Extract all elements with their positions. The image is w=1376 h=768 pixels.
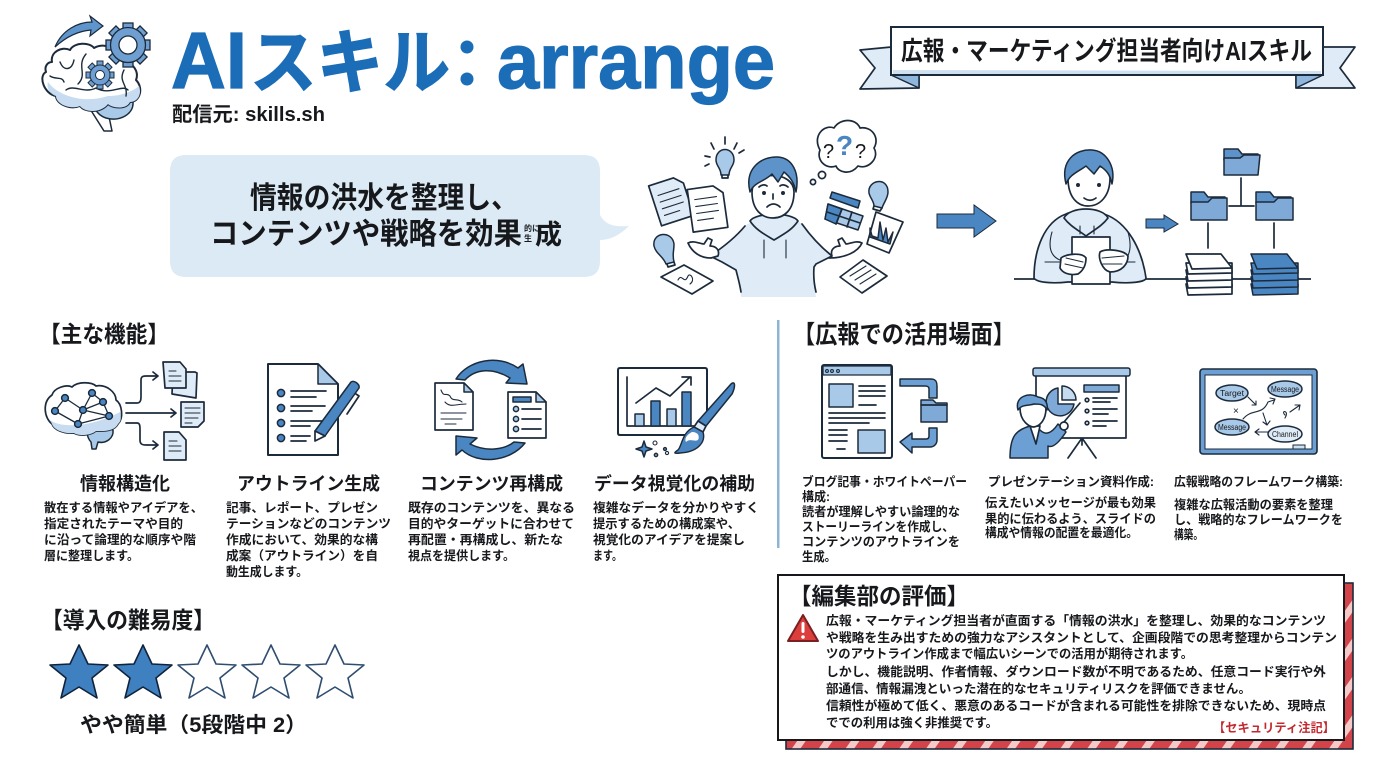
use case text: presentation: 伝えたいメッセージが最も効果 xyxy=(985,495,1156,510)
icon: strategy whiteboard xyxy=(1200,369,1317,454)
icon: outline document with pen xyxy=(268,364,359,455)
icon: blog window with folder xyxy=(822,365,947,458)
heading: PR use cases: 【広報での活用場面】 xyxy=(793,321,1015,349)
thought bubble with question marks xyxy=(810,120,876,185)
speech bubble: tagline: コンテンツや戦略を効果 xyxy=(210,218,522,251)
feature text: restructure xyxy=(408,500,575,563)
icon: warning triangle xyxy=(788,615,818,641)
use case text: blog: 生成。 xyxy=(802,549,836,564)
feature title: restructure: コンテンツ再構成 xyxy=(420,473,563,494)
icon: light bulb top xyxy=(705,137,744,178)
panel: editorial review xyxy=(778,575,1353,749)
star rating: 2 of 5 xyxy=(50,645,364,698)
feature text: restructure: 再配置・再構成し、新たな xyxy=(408,532,563,547)
heading: difficulty: 【導入の難易度】 xyxy=(41,607,215,633)
feature text: structuring: 指定されたテーマや目的 xyxy=(44,516,183,531)
feature title: outline: アウトライン生成 xyxy=(237,473,380,494)
use case text: framework: し、戦略的なフレームワークを xyxy=(1174,512,1343,527)
use case text: blog: ストーリーラインを作成し、 xyxy=(802,519,954,534)
feature text: data visualization: 提示するための構成案や、 xyxy=(593,516,740,531)
review text: や戦略を生み出すための強力なアシスタントとして、企画段階での思考整理からコンテン xyxy=(826,630,1337,645)
icon: light bulb right xyxy=(869,182,888,211)
feature text: outline: 記事、レポート、プレゼン xyxy=(226,500,378,515)
title: arrange xyxy=(497,17,775,105)
use case text: blog xyxy=(802,474,967,564)
thought bubble with question marks: ? xyxy=(836,130,853,161)
feature text: structuring: 層に整理します。 xyxy=(44,548,139,563)
arrow: before to after xyxy=(937,205,996,237)
review text: 部通信、情報漏洩といった潜在的なセキュリティリスクを評価できません。 xyxy=(826,681,1251,696)
icon: light bulb left low xyxy=(654,234,675,267)
feature text: restructure: 既存のコンテンツを、異なる xyxy=(408,500,575,515)
feature text: restructure: 視点を提供します。 xyxy=(408,548,515,563)
difficulty label: やや簡単（5段階中 2） xyxy=(80,714,307,737)
icon: strategy whiteboard: Message xyxy=(1218,423,1246,432)
use case text: blog: 構成: xyxy=(802,489,830,504)
table chart xyxy=(825,192,863,230)
feature text: data visualization xyxy=(593,500,759,563)
blue paper stack xyxy=(1251,254,1298,295)
speech bubble: tagline xyxy=(170,155,629,277)
feature title: data visualization: データ視覚化の補助 xyxy=(594,473,755,494)
use case text: framework: 複雑な広報活動の要素を整理 xyxy=(1174,497,1333,512)
use case text: presentation xyxy=(985,474,1156,540)
heading: main features: 【主な機能】 xyxy=(39,321,169,347)
person body xyxy=(688,157,862,297)
note sketch xyxy=(661,265,713,294)
illustration: confused person with scattered information xyxy=(649,120,903,297)
tilted document xyxy=(840,260,887,293)
icon: strategy whiteboard: × xyxy=(1233,406,1239,417)
feature text: outline: 作成において、効果的な構 xyxy=(226,532,378,547)
feature text: structuring: 散在する情報やアイデアを、 xyxy=(44,500,203,515)
bar chart document xyxy=(867,212,903,253)
icon: brain with gears logo xyxy=(42,16,150,131)
use case text: presentation: プレゼンテーション資料作成: xyxy=(988,474,1154,489)
use case text: framework xyxy=(1174,474,1343,542)
feature text: restructure: 目的やターゲットに合わせて xyxy=(408,516,574,531)
arrow: small to folders xyxy=(1146,215,1178,232)
review text: しかし、機能説明、作者情報、ダウンロード数が不明であるため、任意コード実行や外 xyxy=(826,664,1326,679)
icon: presenter with screen xyxy=(1010,368,1130,458)
speech bubble: tagline: 成 xyxy=(535,220,562,250)
folder tree xyxy=(1191,149,1293,248)
icon: brain to documents xyxy=(45,362,204,460)
speech bubble: tagline: 情報の洪水を整理し、 xyxy=(250,182,518,215)
section divider xyxy=(777,320,780,548)
use case text: framework: 構築。 xyxy=(1174,527,1203,542)
thought bubble with question marks: ? xyxy=(855,141,866,163)
use case text: blog: ブログ記事・ホワイトペーパー xyxy=(802,474,967,489)
feature text: data visualization: ます。 xyxy=(593,549,622,563)
feature text: structuring xyxy=(44,500,203,563)
review text: 広報・マーケティング担当者が直面する「情報の洪水」を整理し、効果的なコンテンツ xyxy=(826,613,1326,628)
speech bubble: tagline: 生 xyxy=(524,233,532,243)
use case text: presentation: 果的に伝わるよう、スライドの xyxy=(985,511,1156,526)
review text: 信頼性が極めて低く、悪意のあるコードが含まれる可能性を排除できないため、現時点 xyxy=(826,698,1326,713)
speech bubble: tagline: 的に xyxy=(524,223,540,233)
feature text: outline xyxy=(226,500,391,579)
thought bubble with question marks: ? xyxy=(823,141,834,163)
title: スキル xyxy=(250,24,450,102)
security note label: 【セキュリティ注記】 xyxy=(1213,720,1335,735)
icon: content restructuring cycle xyxy=(435,360,546,460)
use case text: blog: 読者が理解しやすい論理的な xyxy=(802,504,960,519)
feature text: outline: 動生成します。 xyxy=(226,564,308,579)
title: AI xyxy=(171,16,247,105)
feature text: data visualization: 複雑なデータを分かりやすく xyxy=(593,500,759,515)
scattered documents left xyxy=(649,175,728,232)
feature text: outline: 成案（アウトライン）を自 xyxy=(226,548,378,563)
review text: ツのアウトライン作成まで幅広いシーンでの活用が期待されます。 xyxy=(826,646,1193,661)
title xyxy=(171,16,775,105)
feature title: structuring: 情報構造化 xyxy=(80,474,170,494)
feature text: structuring: に沿って論理的な順序や階 xyxy=(44,532,196,547)
feature text: outline: テーションなどのコンテンツ xyxy=(226,516,391,531)
use case text: presentation: 構成や情報の配置を最適化。 xyxy=(985,525,1138,540)
heading: editorial review: 【編集部の評価】 xyxy=(789,583,969,609)
use case text: framework: 広報戦略のフレームワーク構築: xyxy=(1174,474,1343,489)
icon: data chart with paintbrush xyxy=(618,368,734,457)
illustration: organized person with folders xyxy=(1014,149,1311,295)
white paper stack xyxy=(1186,254,1232,295)
use case text: blog: コンテンツのアウトラインを xyxy=(802,535,960,549)
subtitle: source: 配信元: skills.sh xyxy=(172,103,325,126)
review text: ででの利用は強く非推奨です。 xyxy=(826,715,998,730)
review text xyxy=(826,613,1337,730)
icon: strategy whiteboard: Channel xyxy=(1272,430,1298,439)
banner: target audience xyxy=(860,27,1355,89)
feature text: data visualization: 視覚化のアイデアを提案し xyxy=(593,532,745,547)
icon: strategy whiteboard: Target xyxy=(1220,389,1245,398)
icon: strategy whiteboard: Message xyxy=(1271,385,1299,394)
